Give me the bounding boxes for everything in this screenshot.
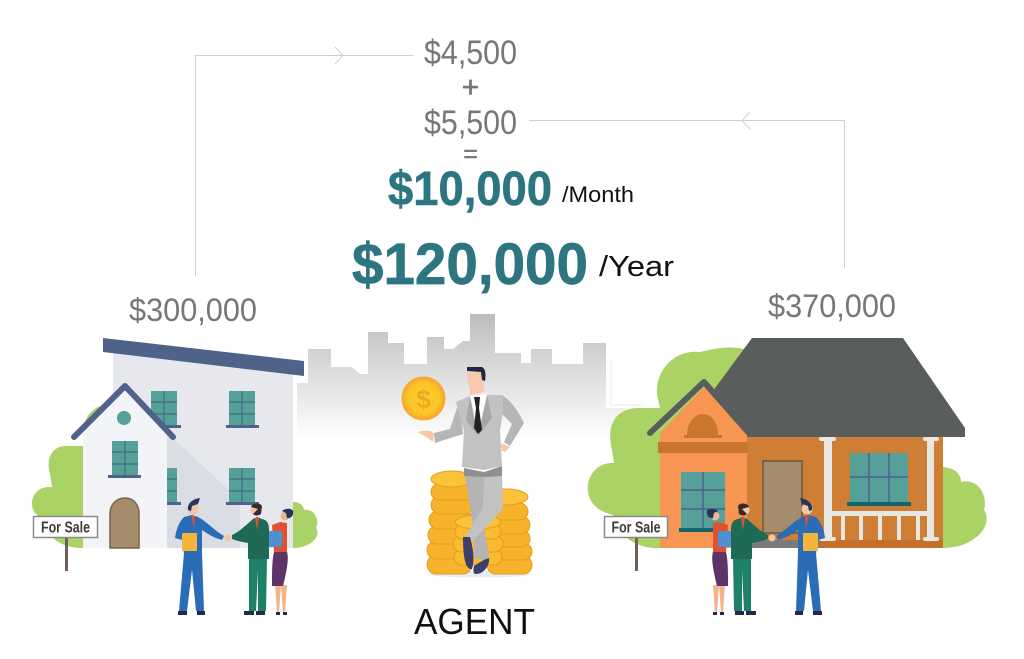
right house scene — [588, 338, 987, 571]
lower left window — [167, 468, 181, 505]
dormer vent — [684, 414, 722, 438]
main wall — [113, 350, 293, 548]
hand — [417, 431, 434, 442]
trouser waist band — [464, 466, 502, 477]
front coin stack — [453, 515, 503, 565]
upper right window — [226, 391, 259, 428]
connector arrow: right house to $5,500 — [529, 112, 844, 268]
coin — [402, 376, 446, 420]
right house price: $370,000 — [768, 288, 896, 324]
wall shadow — [167, 433, 240, 548]
right bushes — [588, 347, 987, 548]
left house price: $300,000 — [129, 292, 257, 328]
equals sign: = — [463, 140, 478, 168]
skyline backdrop — [297, 314, 660, 445]
gable roof — [74, 386, 173, 437]
left coin stack — [427, 471, 473, 574]
agent with coin stacks — [402, 367, 532, 578]
door — [763, 461, 802, 533]
head — [467, 372, 484, 395]
lapel — [466, 395, 492, 436]
agent label: AGENT — [414, 601, 535, 642]
for sale sign: For Sale — [612, 520, 661, 536]
coin: $ — [416, 384, 431, 414]
left bushes — [32, 406, 317, 548]
green agent — [731, 503, 776, 615]
main wall — [747, 437, 943, 548]
plus sign: + — [462, 71, 479, 104]
people shaking hands, right — [707, 498, 825, 615]
woman with folder — [707, 509, 731, 615]
sloped roof — [103, 338, 304, 376]
shadow under coins — [428, 570, 532, 578]
right arm — [500, 396, 524, 446]
people shaking hands, left — [175, 498, 293, 615]
for sale sign: For Sale — [41, 520, 90, 536]
right window — [847, 453, 911, 506]
bottom band — [820, 540, 943, 548]
yearly total: $120,000 — [352, 232, 588, 297]
gable wall — [660, 387, 747, 548]
left arm — [434, 399, 463, 443]
left window — [679, 472, 725, 532]
gable roof — [650, 382, 748, 433]
lower right window — [226, 468, 259, 505]
for sale sign — [604, 516, 668, 571]
blue agent — [175, 498, 224, 615]
porch posts — [819, 437, 939, 541]
left house scene — [32, 338, 317, 571]
per month label: /Month — [562, 182, 634, 207]
front window — [108, 441, 141, 478]
shirt — [470, 394, 487, 436]
commission one: $4,500 — [424, 34, 517, 72]
monthly total: $10,000 — [388, 163, 552, 216]
tie — [474, 397, 482, 434]
arched door — [110, 498, 139, 548]
for sale sign — [34, 516, 98, 571]
door step — [752, 540, 820, 548]
front gable — [83, 390, 167, 548]
connector arrow: left house to $4,500 — [196, 47, 413, 276]
hair — [467, 367, 486, 381]
jacket — [456, 395, 503, 470]
per year label: /Year — [599, 251, 674, 283]
shoes — [463, 537, 473, 569]
woman with folder — [269, 509, 293, 615]
round window — [117, 411, 131, 425]
commission two: $5,500 — [424, 104, 517, 142]
green agent — [224, 503, 269, 615]
upper left window — [151, 391, 181, 428]
back trouser leg — [465, 476, 489, 561]
blue agent — [776, 498, 825, 615]
right coin stack — [484, 489, 532, 574]
front trouser leg — [466, 476, 503, 542]
porch railing — [832, 511, 927, 540]
gable band — [658, 442, 748, 453]
calculation text — [352, 34, 674, 297]
roof — [710, 338, 965, 437]
